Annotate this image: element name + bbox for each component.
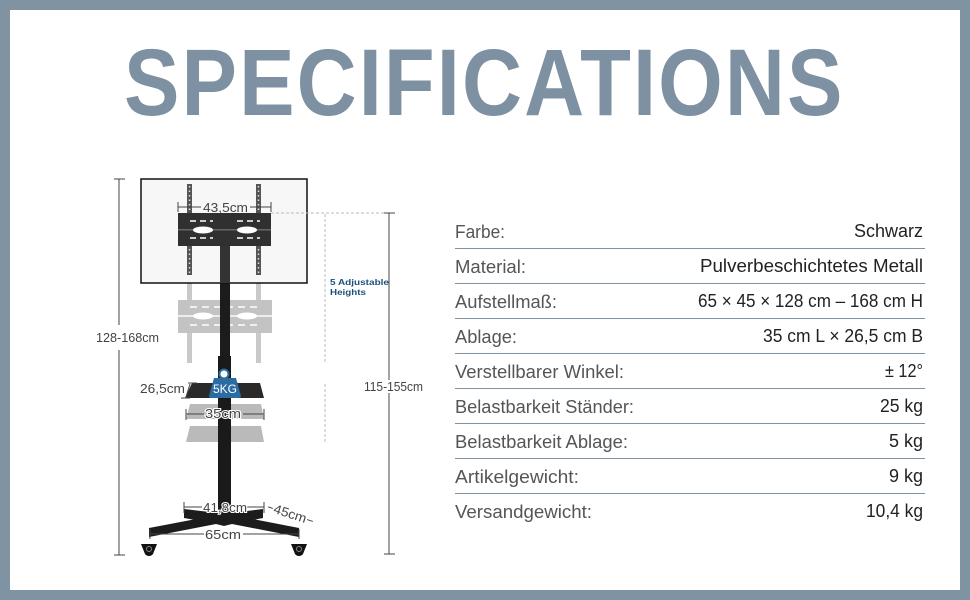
dimension: inner base width: 41,8cm xyxy=(203,500,247,515)
row: Material xyxy=(455,256,923,277)
row dividers xyxy=(455,248,925,494)
row: Ablage: Ablage: xyxy=(455,327,517,347)
label: adjustable heights: 5 Adjustable xyxy=(330,277,389,287)
row: Belastbarkeit Ständer xyxy=(455,396,923,417)
row: Farbe: Farbe: xyxy=(455,222,505,242)
row: Verstellbarer Winkel: ± 12° xyxy=(885,361,923,381)
base xyxy=(149,509,299,537)
ghost lower shelves xyxy=(186,404,264,442)
dimension: shelf width xyxy=(186,406,264,421)
row: Farbe xyxy=(455,221,923,242)
row: Aufstellmaß: 65 × 45 × 128 cm – 168 cm H xyxy=(698,291,923,311)
ghost lower positions of mount xyxy=(178,283,272,363)
row: Verstellbarer Winkel: Verstellbarer Winkel: xyxy=(455,362,624,382)
dimension: shelf depth xyxy=(140,381,197,398)
row: Verstellbarer Winkel xyxy=(455,361,923,382)
label: adjustable heights: Heights xyxy=(330,287,366,297)
dimension: inner base width xyxy=(184,500,264,515)
dimension: base width xyxy=(150,527,299,542)
shelf xyxy=(185,383,264,398)
row: Artikelgewicht: 9 kg xyxy=(889,466,923,486)
dimension: mount height: 115-155cm xyxy=(364,379,423,394)
row: Aufstellmaß xyxy=(455,291,923,312)
dashed height guides xyxy=(271,213,385,444)
dimension: base depth xyxy=(266,499,315,528)
dimension: VESA width: 43,5cm xyxy=(203,200,248,215)
row: Versandgewicht xyxy=(455,501,923,522)
dimension: total height xyxy=(96,179,159,555)
row: Belastbarkeit Ständer: 25 kg xyxy=(880,396,923,416)
row: Versandgewicht: 10,4 kg xyxy=(866,501,923,521)
dimension: base depth: 45cm xyxy=(272,501,309,526)
row: Material: Material: xyxy=(455,257,526,277)
dimension: total height: 128-168cm xyxy=(96,330,159,345)
dimension: base width: 65cm xyxy=(205,527,241,542)
5 kg weight icon: 5KG xyxy=(213,382,237,396)
row: Belastbarkeit Ablage xyxy=(455,431,923,452)
pole behind screen xyxy=(220,246,230,283)
row: Artikelgewicht xyxy=(455,466,923,487)
row: Material: Pulverbeschichtetes Metall xyxy=(700,256,923,276)
title: SPECIFICATIONS xyxy=(124,29,845,135)
TV screen xyxy=(141,179,307,283)
row: Ablage xyxy=(455,326,923,347)
row: Farbe: Schwarz xyxy=(854,221,923,241)
dimension: shelf depth: 26,5cm xyxy=(140,381,185,396)
row: Artikelgewicht: Artikelgewicht: xyxy=(455,467,579,487)
dimension: shelf width: 35cm xyxy=(205,406,241,421)
row: Aufstellmaß: Aufstellmaß: xyxy=(455,292,557,312)
dimension: mount height xyxy=(364,213,423,554)
product diagram xyxy=(141,179,307,556)
pole xyxy=(218,283,231,518)
specification table xyxy=(455,221,925,522)
row: Versandgewicht: Versandgewicht: xyxy=(455,502,592,522)
VESA mount xyxy=(178,184,271,275)
dimension: VESA width xyxy=(178,200,271,215)
row: Belastbarkeit Ständer: Belastbarkeit Ständer: xyxy=(455,397,634,417)
row: Ablage: 35 cm L × 26,5 cm B xyxy=(763,326,923,346)
label: adjustable heights xyxy=(330,277,389,297)
row: Belastbarkeit Ablage: 5 kg xyxy=(889,431,923,451)
casters xyxy=(141,544,307,556)
row: Belastbarkeit Ablage: Belastbarkeit Ablage: xyxy=(455,432,628,452)
5 kg weight icon xyxy=(209,370,241,398)
